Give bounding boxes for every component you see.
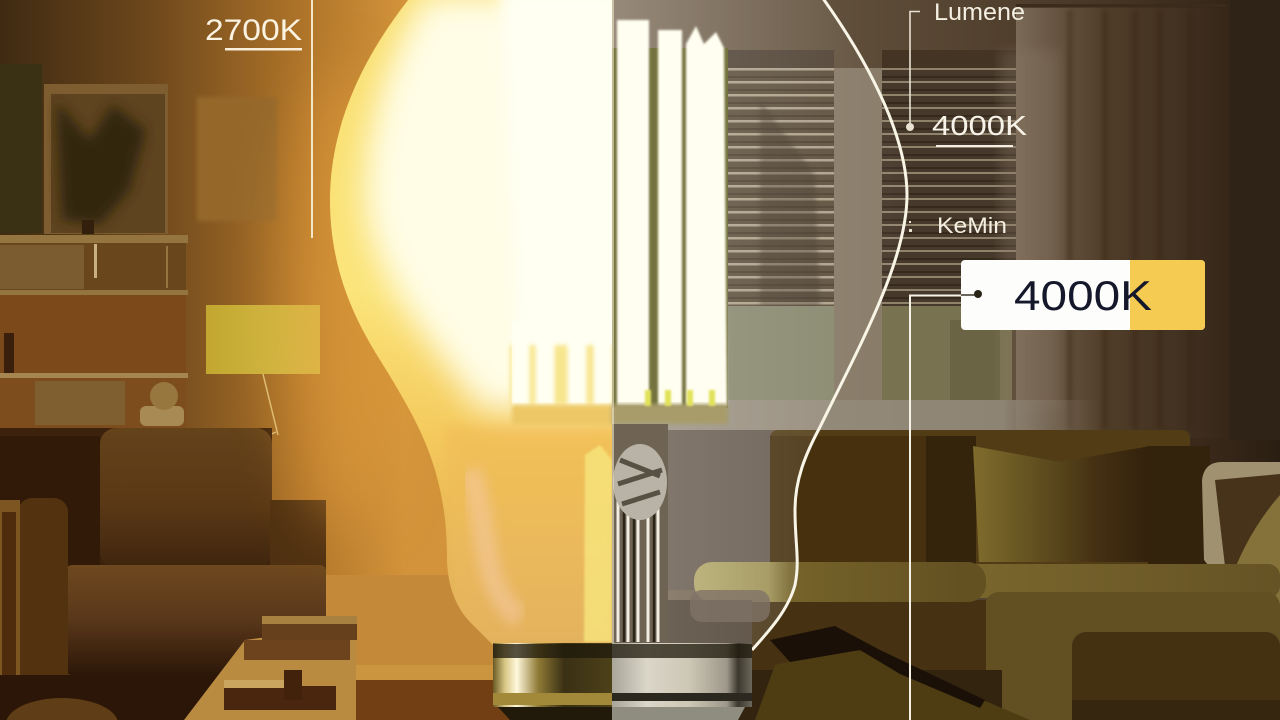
clear filaments <box>612 20 728 424</box>
lower wall <box>612 400 1102 430</box>
callout: Kelvin: KeMin <box>937 213 1007 238</box>
highlighted 4000K label: 4000K <box>1014 272 1152 319</box>
callout: 4000K: 4000K <box>932 110 1027 141</box>
coffee table and books <box>184 616 357 720</box>
framed plant picture <box>44 84 168 234</box>
wall panel behind sofa <box>612 430 772 590</box>
warm glow beside bulb <box>285 70 405 530</box>
callout: 2700K: 2700K <box>205 14 302 47</box>
glass stem <box>584 0 668 645</box>
leader line to label <box>910 290 982 720</box>
sofa <box>694 430 1280 720</box>
warm armchair <box>0 428 326 698</box>
cool floor and table <box>612 600 1280 720</box>
callout: 4000K <box>906 110 1027 147</box>
highlighted 4000K label <box>961 260 1205 330</box>
warm room background <box>0 0 612 720</box>
wall shelves <box>0 235 188 428</box>
callout: Kelvin <box>909 213 1007 238</box>
dark wall art panel <box>0 64 42 233</box>
window with blinds <box>726 50 1060 410</box>
white bulb outline <box>752 0 907 650</box>
bulb glass: warm lit half <box>320 0 620 650</box>
bulb glass: clear half <box>612 0 907 650</box>
floor lamp <box>206 305 320 440</box>
callout: Lumens <box>910 0 1025 127</box>
framed landscape picture <box>197 97 277 221</box>
curtains <box>1016 0 1280 440</box>
light bulb <box>320 0 907 720</box>
warm filaments <box>510 320 612 425</box>
warm floor <box>0 575 612 720</box>
neutral room background <box>612 0 1280 720</box>
metal screw base <box>493 643 752 720</box>
